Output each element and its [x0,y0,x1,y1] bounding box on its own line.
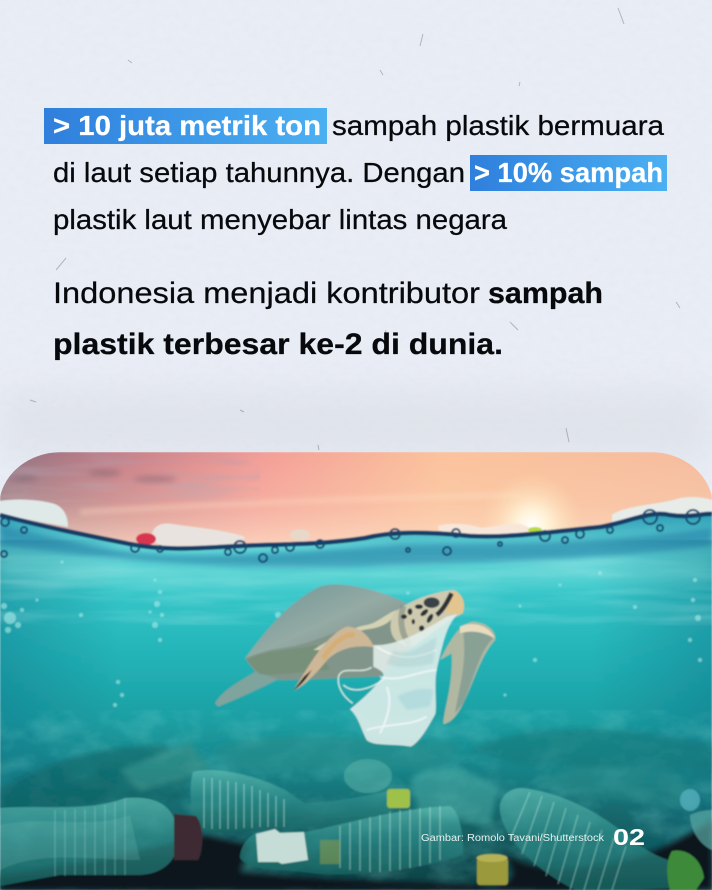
cup and small plastic [344,759,392,793]
page number: 02 [613,824,645,850]
water body [0,514,712,890]
dark sea bottom [0,820,712,890]
bottle: center front [240,806,463,874]
line 1 text: sampah plastik bermuara [332,110,665,141]
bubbles [1,560,702,707]
text block: second paragraph [53,277,603,361]
illustration: turtle in polluted ocean [0,452,712,890]
bottle cap: yellow [476,854,508,885]
shell [245,585,407,658]
floating plastic above water [0,497,712,548]
head [391,590,464,646]
far flipper [440,622,495,724]
text block: second paragraph: Indonesia menjadi kontributor [53,277,480,310]
front flipper [293,627,374,691]
back flipper [215,668,280,707]
bottle: back center [191,770,410,833]
water surface line [0,510,712,589]
text block: second paragraph: plastik terbesar ke-2 di dunia. [53,328,503,361]
body [244,620,410,681]
right edge plastic [680,789,712,850]
sky [0,452,712,547]
text block: second paragraph: sampah [488,277,603,310]
plastic bag [338,614,457,747]
highlight: 10% sampah: > 10% sampah [474,157,663,188]
line 2 text: di laut setiap tahunnya. Dengan [53,157,465,188]
image credit: Gambar: Romolo Tavani/Shutterstock [421,833,605,844]
line 3 text: plastik laut menyebar lintas negara [53,204,508,235]
bottle: right [500,788,704,890]
sea-floor haze and plastic [0,729,712,825]
bottle: left [0,798,202,886]
highlight: 10 juta metrik ton: > 10 juta metrik ton [53,110,321,141]
text block: first paragraph [44,108,667,235]
turtle with plastic bag [215,585,495,747]
